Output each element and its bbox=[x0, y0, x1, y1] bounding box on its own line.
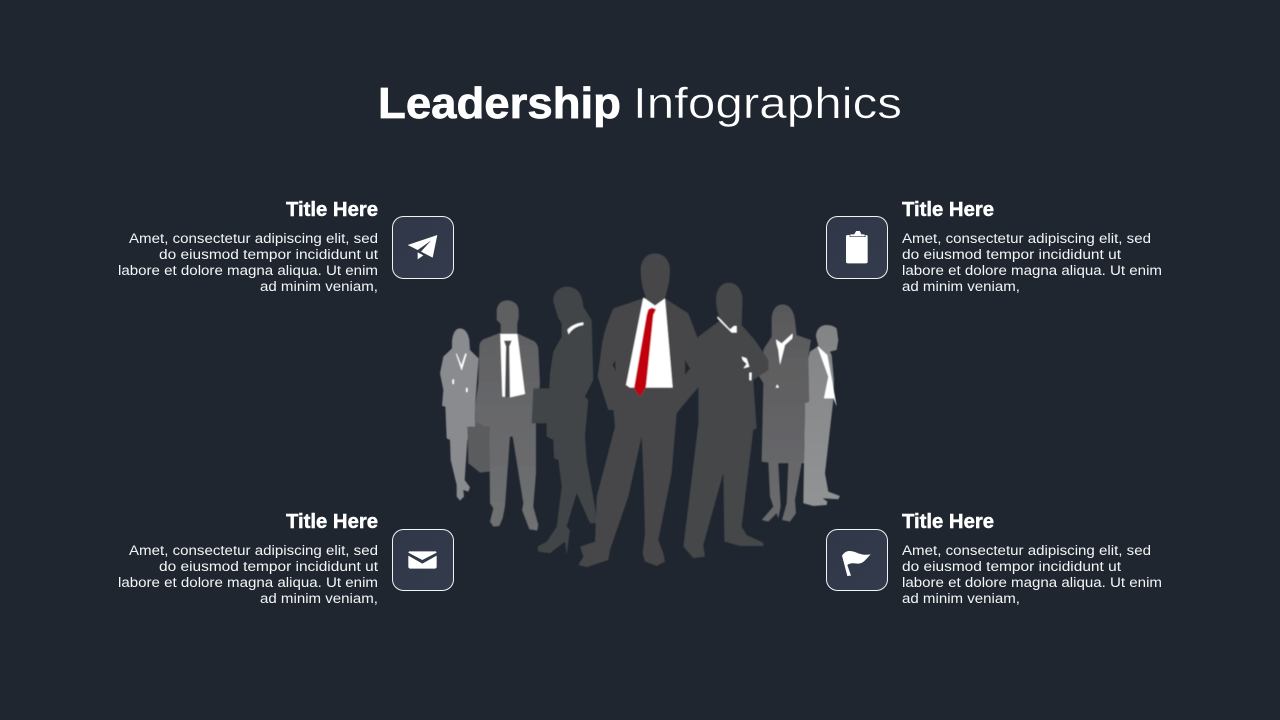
text block: top left: labore et dolore magna aliqua. Ut enim bbox=[118, 263, 378, 278]
text block: top left: Amet, consectetur adipiscing elit, sed bbox=[129, 231, 378, 246]
icon: clipboard bbox=[826, 216, 888, 278]
panel: top right bbox=[826, 199, 1162, 294]
heading: bottom left: Title Here bbox=[286, 511, 378, 533]
heading: top right: Title Here bbox=[902, 199, 994, 221]
icon: paper plane bbox=[392, 216, 454, 278]
heading: top left: Title Here bbox=[286, 199, 378, 221]
text block: top left: do eiusmod tempor incididunt ut bbox=[159, 247, 378, 262]
illustration: group of business people silhouettes bbox=[440, 253, 840, 567]
text block: bottom left bbox=[118, 543, 378, 606]
title bbox=[378, 79, 902, 128]
figure: man with briefcase bbox=[467, 300, 540, 531]
text block: top left bbox=[118, 231, 378, 294]
panel: bottom right bbox=[826, 511, 1162, 606]
text block: bottom right: labore et dolore magna aliqua. Ut enim bbox=[902, 575, 1162, 590]
icon: envelope bbox=[392, 530, 454, 590]
text block: top right: do eiusmod tempor incididunt ut bbox=[902, 247, 1121, 262]
heading: bottom right: Title Here bbox=[902, 511, 994, 533]
text block: bottom right: ad minim veniam, bbox=[902, 591, 1020, 606]
text block: top right: ad minim veniam, bbox=[902, 279, 1020, 294]
text block: bottom right: Amet, consectetur adipiscing elit, sed bbox=[902, 543, 1151, 558]
figure: central man with red tie bbox=[578, 253, 702, 567]
panel: bottom left bbox=[118, 511, 454, 606]
text block: bottom left: Amet, consectetur adipiscing elit, sed bbox=[129, 543, 378, 558]
title: Infographics bbox=[633, 79, 902, 128]
figure: right woman bbox=[758, 304, 811, 522]
text block: bottom right: do eiusmod tempor incididunt ut bbox=[902, 559, 1121, 574]
figure: far-right man bbox=[803, 325, 840, 506]
text block: top right: Amet, consectetur adipiscing elit, sed bbox=[902, 231, 1151, 246]
text block: bottom left: ad minim veniam, bbox=[260, 591, 378, 606]
title: Leadership bbox=[378, 79, 621, 128]
figure: man with crossed arms bbox=[683, 283, 768, 558]
text block: top right bbox=[902, 231, 1162, 294]
icon: flag bbox=[826, 530, 888, 590]
figure: far-left woman bbox=[440, 328, 479, 501]
text block: top left: ad minim veniam, bbox=[260, 279, 378, 294]
text block: top right: labore et dolore magna aliqua. Ut enim bbox=[902, 263, 1162, 278]
text block: bottom left: labore et dolore magna aliqua. Ut enim bbox=[118, 575, 378, 590]
text block: bottom right bbox=[902, 543, 1162, 606]
panel: top left bbox=[118, 199, 454, 294]
text block: bottom left: do eiusmod tempor incididunt ut bbox=[159, 559, 378, 574]
figure: woman in profile with folder bbox=[532, 287, 597, 555]
